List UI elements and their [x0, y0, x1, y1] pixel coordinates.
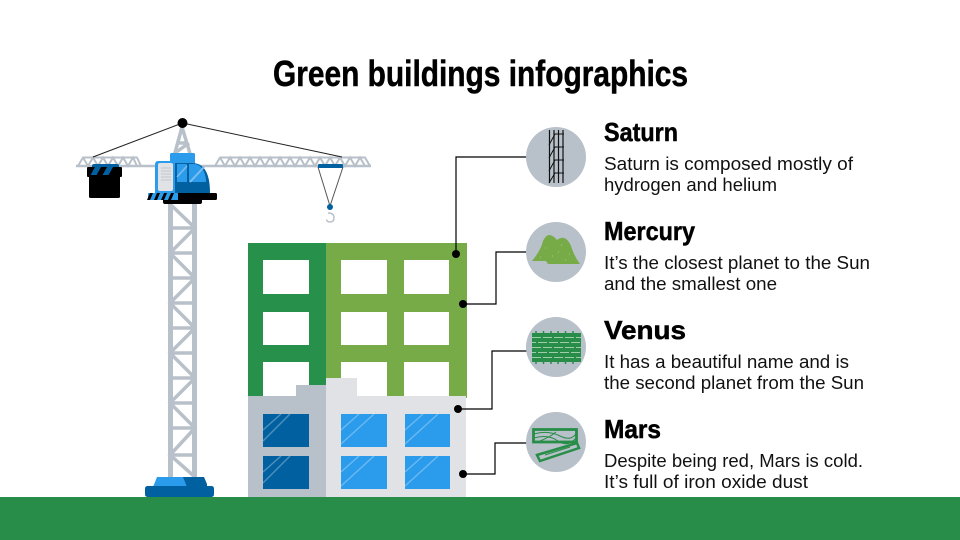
crane: [76, 118, 371, 497]
crane base: [145, 477, 214, 497]
connector: Saturn: [452, 157, 527, 258]
grey lower floors, dark side: [248, 385, 326, 497]
connector: Mercury: [459, 252, 527, 308]
crane top tower: [173, 127, 192, 160]
lower windows, light: [341, 414, 450, 489]
text block: Venus: the second planet from the Sun: [604, 373, 864, 393]
icon: steel rebar: [526, 127, 586, 187]
text block: Saturn: hydrogen and helium: [604, 175, 777, 195]
text block: Venus: [604, 315, 864, 393]
ground: [0, 497, 960, 540]
text block: Mercury: Mercury: [604, 216, 695, 246]
crane top ball: [178, 118, 188, 128]
text block: Saturn: Saturn: [604, 117, 678, 147]
text block: Mars: Despite being red, Mars is cold.: [604, 451, 863, 471]
title: Green buildings infographics: [273, 53, 688, 94]
grey lower floors, light side: [326, 378, 466, 497]
lower windows, dark: [263, 414, 309, 489]
text block: Mercury: It’s the closest planet to the Sun: [604, 253, 870, 273]
window reflections: [263, 414, 438, 486]
text block: Mars: Mars: [604, 414, 661, 444]
text block: Saturn: Saturn is composed mostly of: [604, 154, 854, 174]
crane mast: [170, 200, 195, 480]
crane hook: [318, 164, 343, 222]
building: [248, 243, 467, 497]
text block: Mercury: and the smallest one: [604, 274, 777, 294]
crane jib: [76, 158, 371, 166]
connector: Venus: [454, 351, 527, 413]
counterweight: [87, 164, 122, 198]
upper windows: [263, 260, 449, 397]
text block: Mars: [604, 414, 863, 492]
crane cables: [93, 123, 342, 157]
icon: wood planks: [526, 412, 586, 472]
connector: Mars: [459, 443, 527, 478]
icon: green brick wall: [526, 317, 586, 377]
text block: Mercury: [604, 216, 870, 294]
crane platform: [147, 193, 217, 204]
text block: Saturn: [604, 117, 854, 195]
icon: green hills: [526, 222, 586, 282]
green upper floors: [248, 243, 326, 398]
text block: Venus: It has a beautiful name and is: [604, 352, 849, 372]
crane cabin: [155, 153, 210, 193]
text block: Venus: Venus: [604, 315, 686, 345]
text block: Mars: It’s full of iron oxide dust: [604, 472, 808, 492]
